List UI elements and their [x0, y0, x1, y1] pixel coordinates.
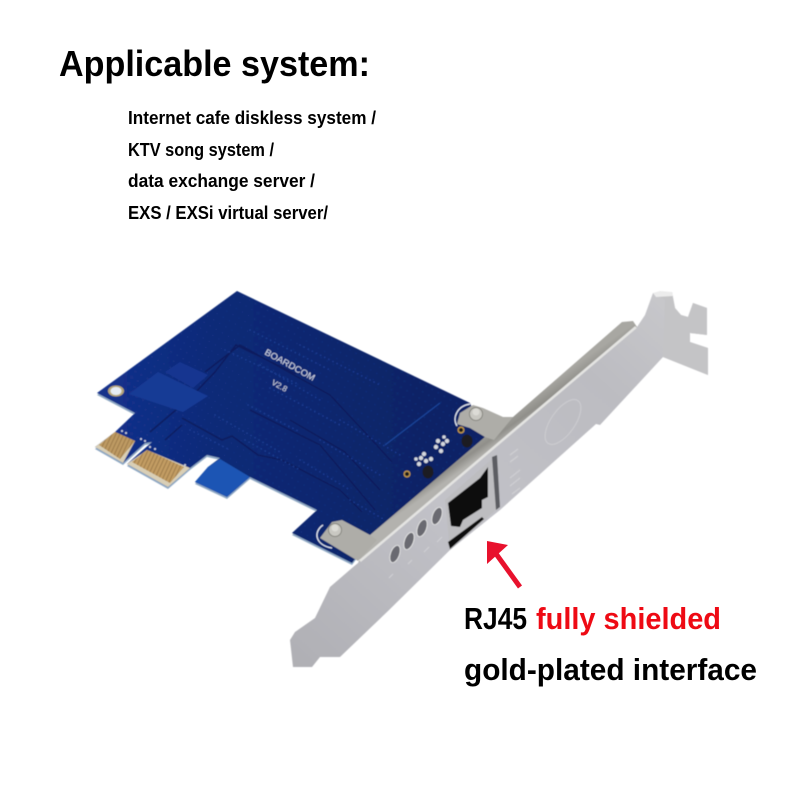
board traces — [150, 345, 392, 512]
text block: applicable systems list — [128, 108, 376, 223]
embossed port marks — [389, 449, 520, 578]
text block: applicable systems list: data exchange server / — [128, 171, 315, 191]
silkscreen: chip label: BOARDCOM — [263, 347, 317, 383]
circuit board — [95, 291, 485, 565]
gold fingers: short — [95, 432, 135, 463]
text block: applicable systems list: EXS / EXSi virtual server/ — [128, 203, 328, 223]
flange — [358, 321, 637, 563]
solder ring: left — [317, 525, 332, 548]
callout — [464, 601, 757, 687]
text block: applicable systems list: Internet cafe diskless system / — [128, 108, 376, 128]
flange highlight — [360, 327, 636, 561]
callout: RJ45 — [464, 601, 527, 636]
finger contact pads — [121, 430, 186, 466]
arrow — [487, 541, 520, 587]
screw ear: right — [457, 405, 513, 440]
mounting hole — [108, 386, 124, 396]
status LEDs — [404, 427, 472, 478]
ventilation slots — [388, 506, 444, 564]
top tab — [653, 292, 708, 375]
bracket face — [290, 292, 708, 667]
callout: fully shielded — [536, 601, 721, 636]
network card photo — [95, 291, 708, 667]
metal bracket — [290, 291, 708, 667]
text block: applicable systems list: KTV song system / — [128, 140, 274, 160]
logo emboss — [538, 394, 588, 450]
copper pad area — [129, 372, 208, 412]
light trace — [385, 403, 440, 445]
gold fingers: long — [127, 450, 190, 487]
via rows — [190, 330, 400, 520]
callout: gold-plated interface — [464, 652, 757, 687]
screw — [328, 524, 342, 536]
title: Applicable system: — [59, 43, 370, 84]
board edge — [95, 293, 485, 565]
screw — [470, 408, 482, 420]
RJ45 port — [445, 455, 500, 550]
silkscreen: version: V2.8 — [270, 378, 289, 394]
PCIe key tab — [195, 459, 250, 497]
solder ring: right — [455, 404, 470, 426]
screw ear: left — [320, 520, 377, 561]
